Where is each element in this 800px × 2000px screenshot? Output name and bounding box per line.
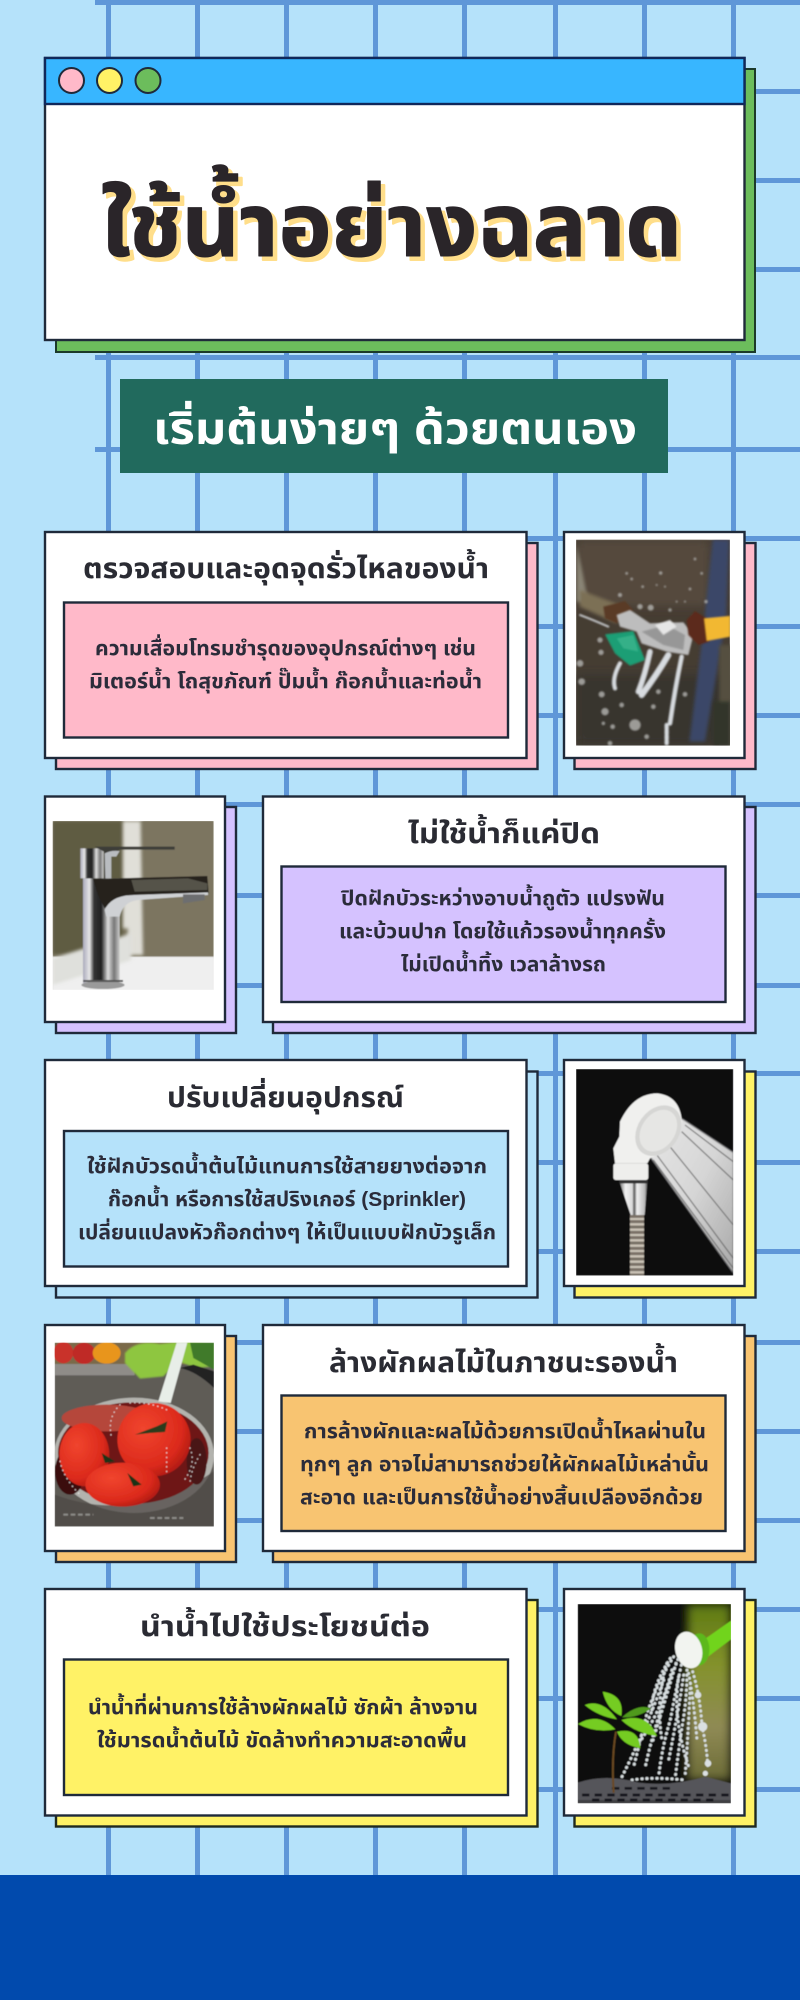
- panel: tomatoes photo: [45, 1325, 236, 1562]
- panel: leaking tap photo: [564, 532, 756, 769]
- heading: wash vegetables: ล้างผักผลไม้ในภาชนะรองน้ำ: [329, 1342, 678, 1378]
- text box: turn it off: ปิดฝักบัวระหว่างอาบน้ำถูตัว แปรงฟัน: [341, 884, 665, 910]
- subtitle banner: [120, 379, 668, 473]
- text box: fix leaks: [64, 602, 508, 738]
- title: ใช้น้ำอย่างฉลาด: [101, 164, 682, 275]
- window title bar: [45, 58, 744, 104]
- text box: change equipment: ก๊อกน้ำ หรือการใช้สปริงเกอร์ (Sprinkler): [108, 1185, 466, 1211]
- text box: wash vegetables: ทุกๆ ลูก อาจไม่สามารถช่วยให้ผักผลไม้เหล่านั้น: [300, 1451, 709, 1476]
- text box: reuse water: ใช้มารดน้ำต้นไม้ ขัดล้างทำความสะอาดพื้น: [97, 1726, 467, 1752]
- photo: shower head: [576, 1069, 733, 1276]
- panel: reuse water: [45, 1589, 538, 1826]
- subtitle banner: เริ่มต้นง่ายๆ ด้วยตนเอง: [153, 401, 637, 454]
- footer band: [0, 1875, 800, 2000]
- heading: turn it off: ไม่ใช้น้ำก็แค่ปิด: [408, 813, 600, 849]
- panel: faucet photo: [45, 796, 236, 1033]
- text box: change equipment: [64, 1131, 508, 1266]
- photo: washing tomatoes: [53, 1342, 214, 1527]
- text box: wash vegetables: [282, 1396, 726, 1531]
- heading: reuse water: นำน้ำไปใช้ประโยชน์ต่อ: [140, 1606, 430, 1642]
- text box: wash vegetables: สะอาด และเป็นการใช้น้ำอย่างสิ้นเปลืองอีกด้วย: [300, 1483, 703, 1509]
- panel: watering can photo: [564, 1589, 756, 1826]
- panel: shower head photo: [564, 1060, 756, 1298]
- text box: wash vegetables: การล้างผักและผลไม้ด้วยการเปิดน้ำไหลผ่านใน: [304, 1417, 706, 1443]
- text box: fix leaks: ความเสื่อมโทรมชำรุดของอุปกรณ์ต่างๆ เช่น: [95, 634, 476, 660]
- title: ใช้น้ำอย่างฉลาด: [105, 168, 686, 279]
- heading: change equipment: ปรับเปลี่ยนอุปกรณ์: [167, 1077, 404, 1114]
- photo: faucet: [53, 821, 214, 990]
- text box: reuse water: [64, 1660, 508, 1795]
- text box: turn it off: ไม่เปิดน้ำทิ้ง เวลาล้างรถ: [401, 950, 606, 976]
- panel: fix leaks: [45, 532, 538, 769]
- text box: reuse water: นำน้ำที่ผ่านการใช้ล้างผักผลไม้ ซักผ้า ล้างจาน: [88, 1693, 478, 1719]
- text box: change equipment: ใช้ฝักบัวรดน้ำต้นไม้แทนการใช้สายยางต่อจาก: [87, 1152, 487, 1178]
- text box: turn it off: และบ้วนปาก โดยใช้แก้วรองน้ำทุกครั้ง: [339, 917, 666, 943]
- heading: fix leaks: ตรวจสอบและอุดจุดรั่วไหลของน้ำ: [83, 548, 489, 585]
- window buttons: [59, 68, 160, 93]
- photo: leaking tap: [576, 540, 733, 746]
- panel: wash vegetables: [263, 1325, 756, 1562]
- text box: fix leaks: มิเตอร์น้ำ โถสุขภัณฑ์ ปั๊มน้ำ ก๊อกน้ำและท่อน้ำ: [89, 667, 482, 693]
- panel: title window: [45, 58, 755, 352]
- photo: watering plant: [578, 1604, 731, 1803]
- panel: change equipment: [45, 1060, 538, 1298]
- text box: turn it off: [282, 866, 726, 1002]
- panel: turn it off: [263, 796, 756, 1033]
- text box: change equipment: เปลี่ยนแปลงหัวก๊อกต่างๆ ให้เป็นแบบฝักบัวรูเล็ก: [78, 1218, 496, 1244]
